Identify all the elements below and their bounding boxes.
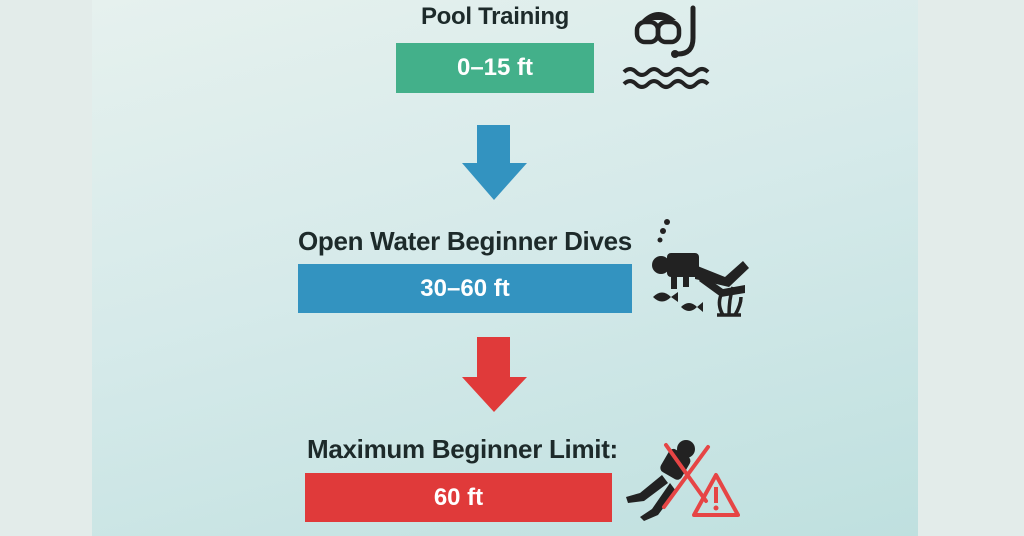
heading: open water beginner dives: Open Water Beginner Dives — [298, 226, 632, 256]
arrow: blue down — [462, 125, 527, 200]
heading: maximum beginner limit: Maximum Beginner Limit: — [307, 434, 618, 464]
icon: scuba diver with fish — [652, 219, 749, 317]
icon: crossed diver with warning — [626, 440, 740, 521]
icon: snorkel mask and waves — [622, 6, 710, 90]
depth bar: 60 ft — [305, 473, 612, 522]
depth bar: 0-15 ft — [396, 43, 594, 93]
depth bar: 60 ft: 60 ft — [434, 484, 483, 510]
heading: pool training: Pool Training — [421, 3, 569, 30]
depth bar: 0-15 ft: 0–15 ft — [457, 54, 533, 81]
depth bar: 30-60 ft — [298, 264, 632, 313]
arrow: red down — [462, 337, 527, 412]
depth bar: 30-60 ft: 30–60 ft — [420, 274, 510, 302]
